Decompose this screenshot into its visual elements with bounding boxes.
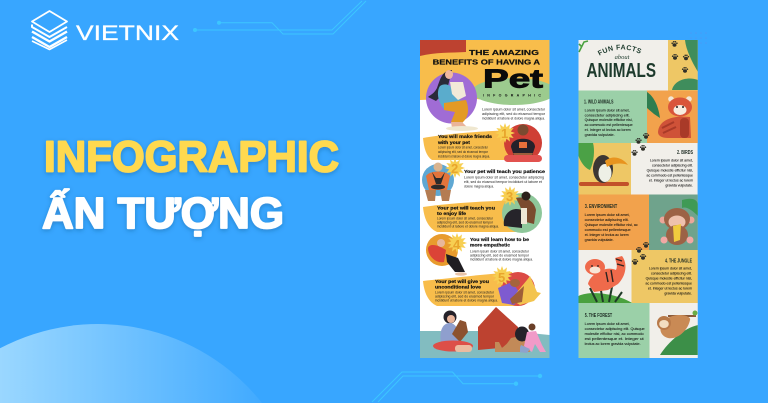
- illustration: tiger: [578, 256, 632, 303]
- section 2: elit, sed do eiusmod tempor incididunt ut labore et: [464, 180, 542, 184]
- section 4: the jungle: ac commodo est pellentesque: [646, 282, 692, 286]
- section 4: the jungle: [646, 258, 692, 296]
- section 1: wild animals: et. Integer ut lectus ac lorem: [585, 128, 631, 132]
- section 4: 4: [453, 237, 461, 252]
- section 5: the forest: lectus ac lorem gravida vulputate.: [585, 342, 641, 346]
- section 3: environment: gravida vulputate.: [585, 238, 614, 242]
- title: INFOGRAPHIC: [483, 93, 541, 97]
- section 5: the forest: molestie efficitur nisi, ac commodo: [585, 332, 644, 336]
- section 4: incididunt ut labore et dolore magna aliqua.: [470, 258, 533, 262]
- illustration: toucan: [578, 143, 629, 186]
- heading: infographic: INFOGRAPHIC: [44, 132, 339, 182]
- section 1: Lorem ipsum dolor sit amet, consectetur: [438, 146, 489, 150]
- section 4: the jungle: consectetur adipiscing elit.: [651, 272, 692, 276]
- section 2: birds: ac commodo est pellentesque: [646, 174, 693, 178]
- section 4: more empathetic: [470, 242, 511, 248]
- section 4: Lorem ipsum dolor sit amet, consectetur: [470, 250, 530, 254]
- title: [586, 44, 656, 77]
- intro text: [482, 108, 546, 120]
- section 1: wild animals: ac commodo est pellentesque: [585, 123, 633, 127]
- section 2: dolore magna aliqua.: [464, 184, 494, 188]
- section 3: environment: Lorem ipsum dolor sit amet,: [585, 213, 630, 217]
- section 4: the jungle: Quisque molestie efficitur nisi,: [646, 276, 692, 280]
- heading: an tuong: ẤN TƯỢNG: [42, 188, 284, 238]
- section 1: wild animals: Quisque molestie efficitur nisi,: [585, 118, 633, 122]
- illustration: ground and pet house: [420, 307, 550, 358]
- section 2: birds: Quisque molestie efficitur nisi,: [647, 168, 693, 172]
- icon: corner leaf: [579, 41, 588, 52]
- illustration: monkey: [660, 199, 698, 245]
- green ellipse: [474, 78, 550, 105]
- illustration: sloth: [657, 310, 698, 355]
- section 3: environment: commodo est pellentesque: [585, 228, 631, 232]
- section 1: wild animals: Lorem ipsum dolor sit amet,: [585, 108, 630, 112]
- section 2: birds: Lorem ipsum dolor sit amet,: [650, 158, 693, 162]
- panel: pet infographic: [420, 40, 556, 358]
- section 5: the forest: 5. THE FOREST: [585, 313, 612, 319]
- section 5: [423, 266, 541, 306]
- section 2: birds: [646, 150, 693, 188]
- leaves and paws top right: [671, 40, 698, 90]
- section 3: environment: Quisque molestie efficitur nisi, ac: [585, 223, 638, 227]
- section 3: adipiscing elit, sed do eiusmod tempor: [437, 220, 494, 224]
- illustration: woman with pet: [426, 70, 478, 131]
- title: THE AMAZING: [469, 48, 540, 57]
- section 5: the forest: consectetur adipiscing elit. Quisque: [585, 327, 645, 331]
- section 3: incididunt ut labore et dolore magna aliqua.: [437, 224, 499, 228]
- section 2: Your pet will teach you patience: [464, 169, 546, 174]
- section 5: unconditional love: [435, 284, 482, 290]
- title: FUN FACTS: [598, 44, 642, 56]
- dot grid decoration: [690, 32, 707, 44]
- title: about: [615, 54, 630, 61]
- section 5: the forest: est pellentesque et. Integer ut: [585, 337, 644, 341]
- section 4: the jungle: gravida vulputate.: [664, 292, 692, 296]
- illustration: leaves near red panda: [647, 92, 660, 118]
- section 3: to enjoy life: [437, 211, 467, 216]
- title: ANIMALS: [586, 60, 656, 82]
- section 4: the jungle: 4. THE JUNGLE: [665, 258, 692, 264]
- section 3: [423, 186, 542, 233]
- section 5: the forest: Lorem ipsum dolor sit amet,: [585, 322, 630, 326]
- section 3: environment: consectetur adipiscing elit.: [585, 218, 629, 222]
- decorative circle bottom left: [0, 324, 262, 403]
- section 1: wild animals: consectetur adipiscing elit.: [585, 113, 630, 117]
- section 5: the forest: [585, 313, 645, 346]
- paws trail 2: [632, 242, 649, 265]
- section 1: wild animals: 1. WILD ANIMALS: [584, 100, 614, 106]
- paws trail 1: [631, 133, 649, 156]
- illustration: man with dog: [495, 324, 546, 353]
- section 2: birds: et. Integer ut lectus ac lorem: [649, 178, 693, 182]
- section 1: with your pet: [437, 140, 471, 145]
- logo: [32, 11, 179, 50]
- section 4: [426, 233, 533, 276]
- red corner shape: [420, 40, 466, 56]
- section 1: wild animals: [584, 100, 633, 137]
- section 5: adipiscing elit, sed do eiusmod tempor: [435, 294, 495, 298]
- section 5: 5: [498, 270, 505, 285]
- section 3: environment: et. Integer ut lectus ac lorem: [585, 233, 629, 237]
- title: Pet: [483, 64, 543, 94]
- yellow header: [420, 40, 550, 101]
- wordmark: VIETNIX: [76, 22, 179, 45]
- title: [433, 48, 543, 97]
- section 4: adipiscing elit, sed do eiusmod tempor: [470, 254, 530, 258]
- section 1: You will make friends: [438, 134, 493, 139]
- title: BENEFITS OF HAVING A: [433, 57, 540, 66]
- circuit lines top: [194, 1, 366, 34]
- panel colour blocks: [578, 40, 698, 358]
- section 1: wild animals: gravida vulputate.: [585, 133, 615, 137]
- section 3: environment: 3. ENVIRONMENT: [585, 204, 617, 210]
- section 2: birds: consectetur adipiscing elit.: [652, 164, 693, 168]
- section 1: 1: [501, 126, 508, 141]
- section 5: incididunt ut labore et dolore magna aliqua.: [435, 298, 498, 302]
- section 3: environment: [585, 204, 638, 242]
- section 2: birds: gravida vulputate.: [665, 184, 693, 188]
- section 2: [422, 158, 546, 201]
- icon: server stack: [32, 11, 67, 50]
- intro text: Lorem ipsum dolor sit amet, consectetur: [482, 108, 546, 112]
- section 5: Your pet will give you: [435, 279, 489, 284]
- section 1: [423, 123, 542, 162]
- intro text: adipiscing elit, sed do eiusmod tempor: [482, 112, 546, 116]
- illustration: woman with dog: [433, 310, 473, 352]
- section 4: You will learn how to be: [470, 237, 530, 242]
- section 2: birds: 2. BIRDS: [677, 150, 693, 156]
- circuit lines bottom: [372, 372, 542, 402]
- section 4: the jungle: Lorem ipsum dolor sit amet,: [649, 266, 692, 270]
- section 1: adipiscing elit, sed do eiusmod tempor: [438, 150, 489, 154]
- section 3: 3: [506, 189, 513, 204]
- section 2: 2: [451, 161, 458, 176]
- section 3: Lorem ipsum dolor sit amet, consectetur: [437, 216, 494, 220]
- section 2: Lorem ipsum dolor sit amet, consectetur adipiscing: [464, 176, 544, 180]
- intro text: incididunt ut labore et dolore magna aliqua.: [482, 116, 545, 120]
- panel: fun facts about animals: [578, 40, 698, 358]
- section 5: Lorem ipsum dolor sit amet, consectetur: [435, 290, 495, 294]
- section 1: incididunt ut labore et dolore magna aliqua.: [438, 154, 490, 158]
- section 3: Your pet will teach you: [437, 206, 495, 210]
- illustration: red panda: [658, 96, 692, 138]
- section 4: the jungle: et. Integer ut lectus ac lorem: [648, 286, 692, 290]
